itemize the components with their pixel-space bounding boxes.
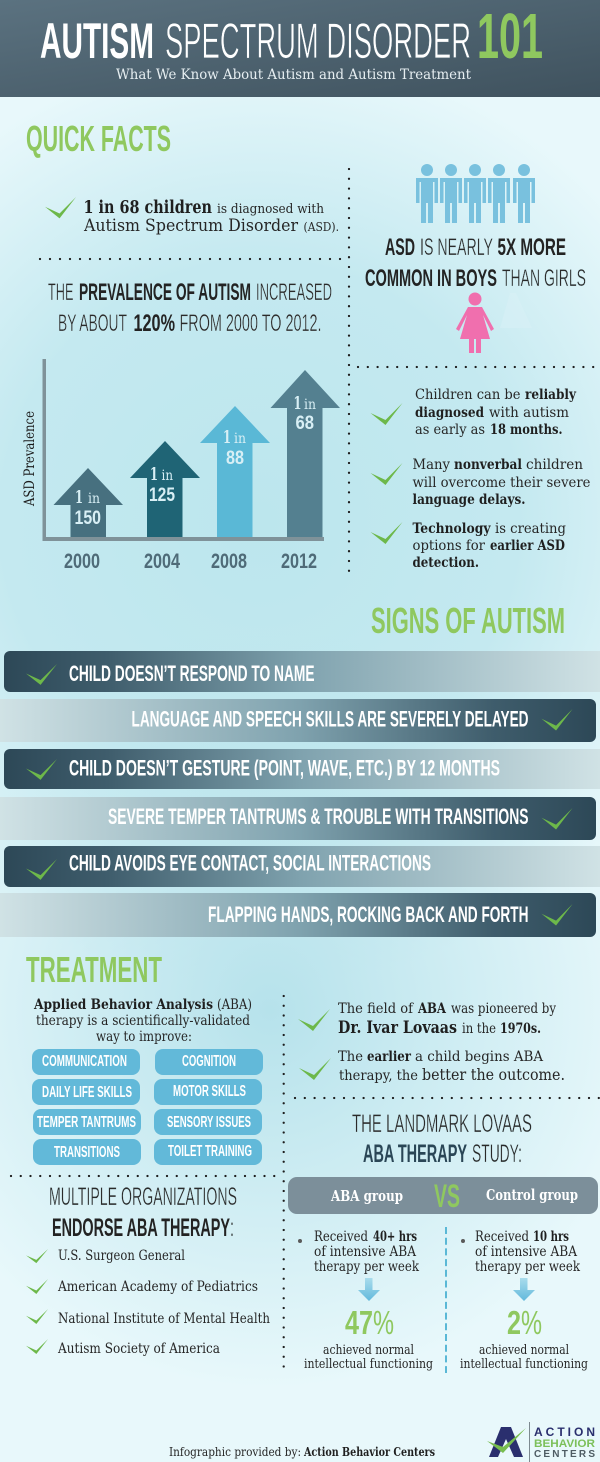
fact: Lovaas: Dr. Ivar Lovaas	[338, 1018, 457, 1038]
check item: technology: earlier ASD	[490, 538, 565, 554]
column: control group results	[460, 1229, 588, 1372]
logo text: BEHAVIOR	[534, 1438, 595, 1450]
heading: prevalence of autism: INCREASED	[256, 279, 332, 306]
check item: technology: Technology	[412, 521, 491, 537]
heading: organizations endorse ABA: :	[230, 1214, 234, 1242]
arrow 2000: 150	[74, 508, 101, 529]
stat: 2%: %	[521, 1304, 542, 1341]
pill: sensory issues	[154, 1109, 262, 1135]
fact text: 1 in 68 children	[84, 198, 212, 218]
arrow 2004	[130, 441, 200, 537]
check item: technology: detection.	[412, 555, 479, 571]
arrow 2008: 1	[223, 427, 231, 448]
heading: organizations endorse ABA: MULTIPLE ORGANIZATIONS	[49, 1183, 237, 1211]
arrow: down	[513, 1278, 535, 1301]
check item: nonverbal children: children	[526, 457, 583, 473]
ABA intro text: (ABA)	[217, 997, 252, 1013]
heading: treatment: TREATMENT	[26, 949, 162, 990]
header banner	[0, 0, 600, 97]
panel: signs of autism bars	[0, 651, 600, 937]
org 2: American Academy of Pediatrics	[57, 1279, 258, 1295]
check item: nonverbal children: language delays.	[412, 492, 526, 508]
axis label: ASD Prevalence	[22, 411, 38, 507]
fact: Lovaas	[298, 1001, 556, 1038]
stat: 47%: %	[373, 1304, 394, 1341]
column: control group results: 10 hrs	[533, 1229, 569, 1245]
column: control group results: Received	[475, 1229, 529, 1245]
ABA intro text	[33, 997, 252, 1045]
arrow 2008: 88	[226, 448, 244, 469]
org 3	[26, 1309, 270, 1327]
heading: prevalence of autism: PREVALENCE OF AUTISM	[79, 279, 251, 306]
year labels: 2004	[144, 550, 180, 573]
column: ABA group results: achieved normal	[323, 1343, 414, 1358]
pill: toilet training	[154, 1139, 262, 1165]
footer credit: Infographic provided by:	[169, 1445, 301, 1459]
pill: toilet training: TOILET TRAINING	[168, 1143, 252, 1160]
fact: Lovaas: The field of	[338, 1001, 415, 1017]
pill: cognition: COGNITION	[182, 1053, 236, 1070]
title: 101	[477, 0, 543, 72]
arrow: down	[358, 1278, 380, 1301]
fact: earlier is better	[299, 1049, 565, 1084]
fact: Lovaas: 1970s.	[500, 1021, 541, 1037]
pill: transitions	[33, 1139, 141, 1165]
arrow 2000	[54, 468, 123, 537]
heading: prevalence of autism: THE	[48, 279, 74, 306]
ABA intro text: Applied Behavior Analysis	[33, 997, 213, 1013]
pill: motor skills: MOTOR SKILLS	[173, 1083, 246, 1100]
icon: five boys	[416, 164, 535, 223]
arrow 2012: in	[304, 397, 316, 413]
year labels: 2008	[211, 550, 247, 573]
logo mark	[487, 1422, 530, 1462]
panel: ABA group vs control group: VS	[434, 1178, 460, 1214]
sign 3	[4, 749, 600, 789]
fact: 1 in 68 children	[45, 197, 339, 235]
panel: ABA group vs control group: Control group	[486, 1187, 578, 1204]
check item: nonverbal children: Many	[412, 457, 450, 473]
heading: prevalence of autism: FROM 2000 TO 2012.	[180, 310, 322, 337]
panel: boys vs girls	[365, 164, 586, 353]
fact: Lovaas: was pioneered by	[451, 1001, 556, 1017]
column: ABA group results	[298, 1229, 433, 1372]
arrow 2012: 1	[294, 393, 302, 414]
arrow 2012	[270, 370, 340, 537]
check item: nonverbal children	[370, 457, 590, 508]
pill: daily life skills: DAILY LIFE SKILLS	[42, 1084, 132, 1101]
logo text	[534, 1425, 595, 1460]
arrow 2004: 125	[149, 485, 175, 506]
fact: earlier is better: better the outcome.	[422, 1066, 565, 1084]
fact text: is diagnosed with	[217, 202, 325, 217]
icon: check	[45, 197, 76, 218]
logo text: ACTION	[534, 1425, 595, 1439]
list: endorsing organizations	[26, 1248, 270, 1357]
arrow 2000: in	[88, 491, 100, 507]
org 4	[26, 1339, 220, 1357]
check item: nonverbal children: nonverbal	[454, 457, 522, 473]
check item: reliably diagnosed	[370, 387, 577, 438]
footer credit	[169, 1445, 435, 1459]
pill: communication: COMMUNICATION	[42, 1053, 127, 1070]
icon: faded figure	[500, 293, 532, 328]
boys vs girls text	[365, 234, 586, 292]
check item: reliably diagnosed: as early as	[415, 422, 485, 438]
pill: communication	[32, 1049, 140, 1075]
pill: temper tantrums: TEMPER TANTRUMS	[37, 1114, 136, 1131]
check item: technology	[370, 521, 566, 571]
pill: sensory issues: SENSORY ISSUES	[167, 1114, 251, 1131]
fact text: (ASD).	[304, 220, 339, 234]
sign 5	[4, 846, 600, 887]
title	[40, 0, 543, 72]
sign 2	[0, 699, 596, 742]
arrow 2008: in	[234, 431, 246, 447]
heading: organizations endorse ABA	[49, 1183, 237, 1242]
org 3: National Institute of Mental Health	[58, 1311, 270, 1327]
pill: cognition	[155, 1049, 263, 1075]
column: ABA group results: therapy per week	[314, 1259, 420, 1275]
check item: technology: is creating	[495, 521, 566, 537]
check item: reliably diagnosed: 18 months.	[490, 422, 562, 438]
arrow 2008	[200, 406, 270, 537]
subtitle: What We Know About Autism and Autism Treatment	[116, 67, 471, 83]
fact: earlier is better: therapy, the	[339, 1068, 418, 1084]
heading: quick facts: QUICK FACTS	[26, 118, 171, 159]
panel: ABA group vs control group: ABA group	[330, 1188, 403, 1205]
column: control group results: of intensive ABA	[475, 1244, 577, 1260]
pill: transitions: TRANSITIONS	[54, 1144, 120, 1161]
heading: Lovaas study	[352, 1110, 532, 1168]
heading: organizations endorse ABA: ENDORSE ABA THERAPY	[52, 1214, 230, 1242]
panel: improvement pills	[32, 1049, 263, 1165]
check item: technology: options for	[412, 538, 485, 554]
check item: reliably diagnosed: reliably	[525, 387, 577, 403]
stat: 2%: 2	[507, 1304, 521, 1341]
heading: prevalence of autism: 120%	[134, 310, 175, 337]
year labels	[64, 550, 317, 573]
fact: earlier is better: a child begins ABA	[415, 1049, 544, 1065]
column: control group results: therapy per week	[475, 1259, 581, 1275]
heading: Lovaas study: STUDY:	[472, 1140, 522, 1168]
column: ABA group results: Received	[314, 1229, 368, 1245]
fact text	[83, 198, 339, 235]
org 1: U.S. Surgeon General	[58, 1248, 185, 1264]
column: ABA group results: intellectual functioning	[304, 1357, 433, 1372]
column: ABA group results: 40+ hrs	[373, 1229, 417, 1245]
check item: nonverbal children: will overcome their severe	[412, 475, 590, 491]
pill: daily life skills	[32, 1079, 140, 1105]
stat: 47%: 47	[345, 1304, 373, 1341]
stat: 2%	[507, 1304, 542, 1341]
icon: girl	[456, 292, 494, 353]
boys vs girls text: IS NEARLY	[420, 234, 493, 261]
panel: ABA group vs control group	[288, 1177, 598, 1214]
pill: temper tantrums	[33, 1109, 141, 1135]
heading: prevalence of autism	[48, 279, 332, 337]
pill: motor skills	[154, 1079, 262, 1105]
logo text: CENTERS	[534, 1449, 595, 1460]
ABA intro text: way to improve:	[96, 1029, 192, 1045]
boys vs girls text: ASD	[385, 234, 415, 261]
check item: reliably diagnosed: diagnosed	[415, 405, 484, 421]
panel: ABA facts	[298, 1001, 565, 1084]
arrow 2004: 1	[150, 464, 158, 485]
sign 6	[0, 893, 596, 937]
year labels: 2000	[64, 550, 100, 573]
fact: Lovaas: in the	[462, 1021, 496, 1037]
panel: early diagnosis checklist	[370, 387, 590, 571]
sign 4	[0, 797, 596, 840]
logo: Action Behavior Centers	[487, 1422, 595, 1462]
arrow 2000: 1	[75, 487, 83, 508]
arrow 2012: 68	[296, 413, 314, 434]
sign 1	[4, 651, 600, 692]
heading: prevalence of autism: BY ABOUT	[58, 310, 127, 337]
fact text: Autism Spectrum Disorder	[83, 216, 298, 235]
heading: Lovaas study: ABA THERAPY	[363, 1140, 467, 1168]
bar chart: ASD prevalence arrows	[22, 359, 340, 573]
sign 1: CHILD DOESN’T RESPOND TO NAME	[69, 661, 314, 686]
column: control group results: achieved normal	[479, 1343, 569, 1358]
fact: earlier is better: earlier	[367, 1049, 412, 1065]
boys vs girls text: COMMON IN BOYS	[365, 265, 497, 292]
footer credit: Action Behavior Centers	[303, 1445, 435, 1459]
check item: reliably diagnosed: Children can be	[415, 387, 520, 403]
year labels: 2012	[281, 550, 317, 573]
check item: reliably diagnosed: with autism	[489, 405, 569, 421]
arrow 2004: in	[162, 468, 173, 484]
ABA intro text: therapy is a scientifically-validated	[36, 1013, 250, 1029]
org 4: Autism Society of America	[57, 1341, 220, 1357]
fact: earlier is better: The	[338, 1049, 363, 1065]
fact: Lovaas: ABA	[417, 1001, 447, 1017]
column: ABA group results: of intensive ABA	[314, 1244, 416, 1260]
title: AUTISM	[40, 13, 154, 69]
